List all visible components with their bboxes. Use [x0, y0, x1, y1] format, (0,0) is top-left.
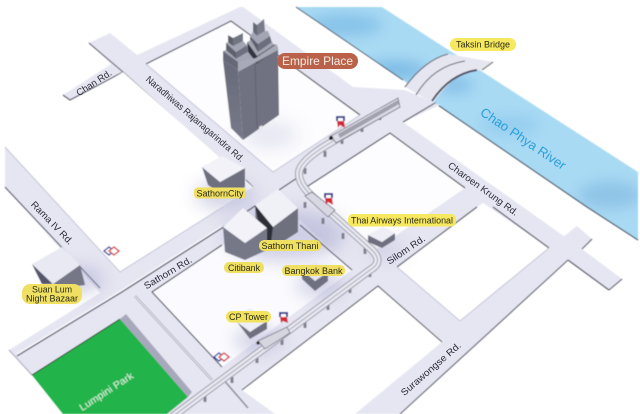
block dark edges [146, 21, 549, 390]
rail station north [329, 98, 400, 143]
Sathorn Thani building [255, 189, 298, 250]
callout: Suan Lum Night Bazaar: Suan Lum [32, 284, 72, 294]
Taksin Bridge deck [405, 54, 493, 103]
callout: Taksin Bridge: Taksin Bridge [456, 40, 510, 50]
callout: Bangkok Bank: Bangkok Bank [284, 266, 343, 276]
Chan road stub [63, 63, 123, 100]
Citibank building [223, 208, 267, 260]
callout: Citibank: Citibank [228, 263, 260, 273]
rail station centre [305, 192, 335, 217]
river bank edge [296, 7, 403, 80]
label: Silom Rd: Silom Rd. [385, 234, 428, 267]
Bangkok Bank building [302, 262, 328, 291]
soft building shadows [52, 121, 405, 352]
callout: Suan Lum Night Bazaar [22, 284, 82, 304]
icon: BTS centre [324, 193, 333, 205]
label: Chao Phya River: Chao Phya River [478, 104, 569, 173]
label: Chan Rd: Chan Rd. [75, 68, 114, 99]
elevated rail line [172, 104, 398, 414]
Lumpini Park label: Lumpini Park [78, 370, 137, 414]
label: Naradhiwas Rajanagarindra Rd: Naradhiwas Rajanagarindra Rd. [143, 74, 246, 165]
label: Sathorn Rd: Sathorn Rd. [142, 255, 194, 292]
text labels [22, 38, 569, 398]
Thai Airways building [368, 227, 395, 248]
label: Surawongse Rd: Surawongse Rd. [399, 340, 464, 398]
Lumpini Park [32, 314, 192, 414]
callout: Sathorn Thani: Sathorn Thani [262, 241, 318, 251]
callout: Thai Airways International: Thai Airways International [351, 216, 453, 226]
Suan Lum building [32, 247, 85, 287]
callout: Empire Place: Empire Place [282, 54, 353, 68]
Surawongse road stub [549, 226, 592, 262]
icon: BTS south [279, 312, 288, 323]
icon: BTS north [336, 116, 345, 128]
river [296, 7, 640, 240]
label: Rama IV Rd: Rama IV Rd. [28, 199, 75, 247]
icon: MRT north [104, 247, 119, 255]
CP Tower building [237, 308, 267, 339]
label: Charoen Krung Rd: Charoen Krung Rd. [445, 160, 520, 219]
Empire Place tower [223, 19, 279, 140]
Sathorn road median [17, 176, 300, 408]
block soft edges [5, 64, 549, 321]
callout: Taksin Bridge [450, 38, 516, 51]
rail station south [256, 327, 290, 349]
callout: SathornCity: SathornCity [196, 188, 244, 198]
SathornCity building [202, 156, 245, 197]
callout: CP Tower: CP Tower [229, 312, 268, 322]
callout: Suan Lum Night Bazaar: Night Bazaar [26, 294, 78, 304]
icon: MRT south [214, 353, 229, 361]
